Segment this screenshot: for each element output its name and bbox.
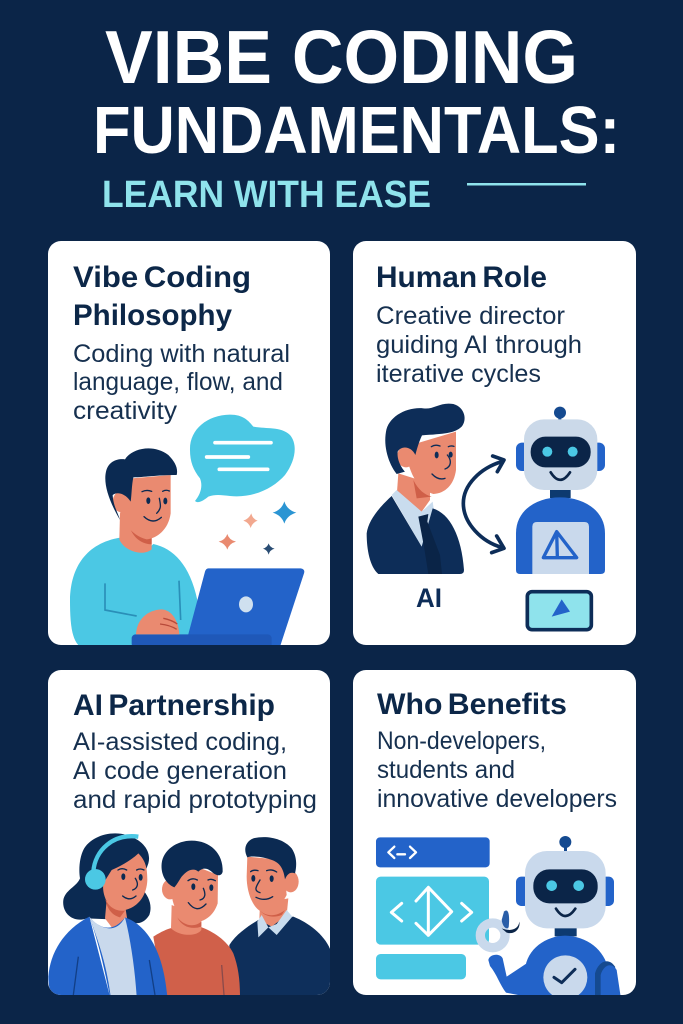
heading: vibe coding philosophy: Vibe Coding: [73, 261, 251, 294]
text: ai partnership description: [73, 728, 317, 814]
text: who benefits description: students and: [377, 756, 515, 784]
title: FUNDAMENTALS:: [93, 93, 620, 168]
text: who benefits description: innovative developers: [377, 785, 617, 813]
heading: vibe coding philosophy: [73, 261, 251, 332]
text: human role description: Creative director: [376, 302, 565, 330]
heading: human role: Human Role: [376, 261, 547, 294]
label: AI: AI: [416, 583, 442, 613]
text: ai partnership description: and rapid prototyping: [73, 786, 317, 814]
subtitle: LEARN WITH EASE: [102, 174, 431, 216]
text: philosophy description: creativity: [73, 397, 178, 425]
icon: director and robot with cycle arrows: [367, 404, 605, 630]
panel: ai partnership: [48, 670, 332, 997]
heading: ai partnership: AI Partnership: [73, 689, 275, 722]
text: philosophy description: language, flow, and: [73, 368, 283, 396]
panel: who benefits: [353, 670, 636, 999]
text: human role description: iterative cycles: [376, 360, 541, 388]
text: ai partnership description: AI-assisted coding,: [73, 728, 287, 756]
text: human role description: [376, 302, 582, 388]
icon: person on laptop with speech bubble: [70, 415, 304, 648]
heading: who benefits: Who Benefits: [377, 688, 567, 721]
text: who benefits description: [377, 727, 617, 813]
title: VIBE CODING: [105, 15, 578, 99]
text: philosophy description: Coding with natural: [73, 340, 290, 368]
heading: vibe coding philosophy: Philosophy: [73, 299, 232, 332]
text: who benefits description: Non-developers,: [377, 727, 546, 755]
icon: code panels and robot: [376, 836, 621, 999]
text: human role description: guiding AI through: [376, 331, 582, 359]
panel: vibe coding philosophy: [48, 241, 330, 648]
title: [93, 15, 620, 168]
panel: human role: [353, 241, 636, 645]
icon: three team members: [48, 833, 332, 997]
text: ai partnership description: AI code generation: [73, 757, 287, 785]
text: philosophy description: [73, 340, 290, 425]
